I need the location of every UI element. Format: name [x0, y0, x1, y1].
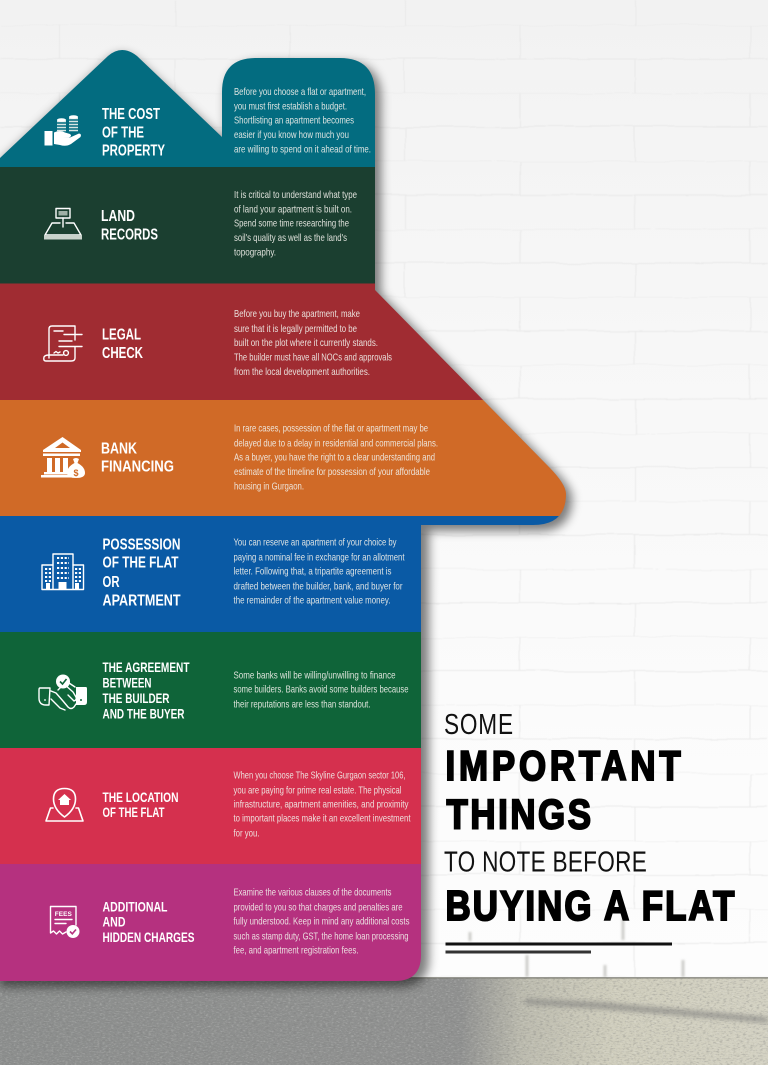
heading: possession of the flat or apartment: OR	[102, 574, 120, 591]
heading: land records	[102, 210, 158, 240]
text: the cost of the property: are willing to spend on it ahead of time.	[234, 144, 371, 156]
heading: the cost of the property: OF THE	[102, 124, 144, 142]
text: land records: soil's quality as well as the land's	[234, 232, 347, 244]
heading: possession of the flat or apartment	[102, 536, 181, 610]
text: bank financing: As a buyer, you have the right to a clear understanding and	[234, 452, 435, 464]
heading: land records: LAND	[101, 208, 135, 225]
icon: location pin with house	[46, 788, 83, 821]
heading: the agreement between the builder and the buyer: THE BUILDER	[102, 690, 170, 706]
panel: the cost of the property	[0, 44, 375, 167]
panel: additional and hidden charges	[0, 864, 421, 981]
text: bank financing: estimate of the timeline for possession of your affordable	[234, 466, 430, 478]
heading: additional and hidden charges: ADDITIONAL	[102, 898, 168, 914]
text: possession of the flat or apartment: the remainder of the apartment value money.	[234, 594, 390, 606]
text: the agreement between the builder and the buyer	[234, 670, 409, 710]
house shadow	[0, 54, 572, 987]
title: IMPORTANT	[446, 743, 681, 790]
heading: the cost of the property: PROPERTY	[102, 142, 165, 160]
title	[444, 707, 734, 930]
text: additional and hidden charges: provided to you so that charges and penalties are	[234, 902, 403, 914]
text: legal check: Before you buy the apartment, make	[234, 308, 360, 320]
text: bank financing: housing in Gurgaon.	[234, 480, 304, 492]
text: possession of the flat or apartment	[234, 536, 405, 606]
heading: the location of the flat: OF THE FLAT	[102, 804, 165, 820]
text: the location of the flat: you are paying for prime real estate. The physical	[234, 784, 402, 796]
text: the agreement between the builder and the buyer: their reputations are less than standout.	[234, 698, 370, 710]
text: the location of the flat: to important places make it an excellent investment	[234, 812, 411, 824]
icon: fees receipt with check	[50, 906, 80, 938]
text: legal check	[234, 308, 392, 378]
text: possession of the flat or apartment: letter. Following that, a tripartite agreement is	[234, 566, 392, 578]
text: the agreement between the builder and the buyer: some builders. Banks avoid some builders because	[234, 684, 409, 696]
heading: legal check: CHECK	[102, 345, 144, 362]
text: legal check: built on the plot where it currently stands.	[234, 337, 378, 349]
heading: bank financing: BANK	[101, 440, 138, 458]
text: additional and hidden charges	[234, 886, 410, 956]
text: the cost of the property: Before you choose a flat or apartment,	[234, 86, 366, 98]
text: possession of the flat or apartment: drafted between the builder, bank, and buyer for	[234, 580, 403, 592]
heading: possession of the flat or apartment: APARTMENT	[102, 592, 181, 610]
panel: legal check	[0, 284, 490, 400]
title: THINGS	[446, 792, 591, 838]
icon: apartment buildings	[42, 554, 84, 590]
heading: the location of the flat: THE LOCATION	[102, 789, 178, 805]
heading: bank financing	[102, 442, 174, 472]
text: bank financing: In rare cases, possession of the flat or apartment may be	[234, 422, 428, 434]
text: the cost of the property	[234, 86, 371, 156]
text: bank financing	[234, 422, 438, 492]
text: bank financing: delayed due to a delay in residential and commercial plans.	[234, 438, 438, 450]
heading: possession of the flat or apartment: OF THE FLAT	[102, 554, 179, 572]
icon: bank with money bag: $	[73, 468, 79, 478]
text: land records: of land your apartment is built on.	[234, 204, 352, 216]
icon: handshake with check mark	[39, 674, 87, 710]
house infographic panels	[0, 44, 575, 981]
title: SOME	[444, 707, 513, 741]
text: land records: Spend some time researching the	[234, 218, 349, 230]
icon: legal document	[44, 326, 82, 361]
title: TO NOTE BEFORE	[444, 845, 647, 878]
heading: the cost of the property: THE COST	[102, 106, 160, 123]
text: additional and hidden charges: fee, and apartment registration fees.	[234, 944, 358, 956]
icon: land plot with sign	[44, 208, 82, 240]
text: the cost of the property: easier if you know how much you	[234, 129, 349, 141]
text: additional and hidden charges: such as stamp duty, GST, the home loan processing	[234, 930, 409, 942]
heading: legal check: LEGAL	[102, 326, 141, 344]
icon: fees receipt with check: FEES	[55, 911, 72, 918]
text: land records: topography.	[234, 246, 276, 258]
text: the cost of the property: Shortlisting an apartment becomes	[234, 114, 354, 126]
heading: the agreement between the builder and the buyer: BETWEEN	[102, 674, 152, 690]
heading: the agreement between the builder and the buyer: THE AGREEMENT	[102, 659, 190, 675]
text: legal check: The builder must have all NOCs and approvals	[234, 352, 392, 364]
text: legal check: sure that it is legally permitted to be	[234, 323, 357, 335]
panel: the location of the flat	[0, 748, 421, 864]
text: additional and hidden charges: fully understood. Keep in mind any additional costs	[234, 916, 410, 928]
icon: hand holding coins	[44, 115, 81, 146]
text: the location of the flat	[234, 770, 411, 840]
text: additional and hidden charges: Examine the various clauses of the documents	[234, 886, 392, 898]
text: the location of the flat: When you choose The Skyline Gurgaon sector 106,	[234, 770, 406, 782]
background: concrete floor	[0, 977, 768, 1065]
text: land records: It is critical to understand what type	[234, 189, 357, 201]
icon: bank with money bag	[41, 437, 85, 478]
heading: bank financing: FINANCING	[101, 458, 174, 476]
text: the location of the flat: for you.	[234, 828, 260, 840]
text: the location of the flat: infrastructure, apartment amenities, and proximity	[234, 798, 409, 810]
text: possession of the flat or apartment: paying a nominal fee in exchange for an allotment	[234, 552, 405, 564]
text: the cost of the property: you must first establish a budget.	[234, 100, 347, 112]
text: land records	[234, 189, 357, 258]
panel: land records	[0, 167, 375, 284]
title: BUYING A FLAT	[446, 883, 734, 930]
title underlines	[446, 942, 672, 954]
heading: the cost of the property	[102, 108, 165, 156]
heading: the agreement between the builder and the buyer: AND THE BUYER	[102, 706, 184, 722]
text: the agreement between the builder and the buyer: Some banks will be willing/unwilling to finance	[234, 670, 396, 682]
panel: bank financing	[0, 400, 575, 516]
heading: the location of the flat	[102, 792, 178, 817]
heading: possession of the flat or apartment: POSSESSION	[102, 536, 180, 554]
panel: possession of the flat or apartment	[0, 516, 560, 632]
text: legal check: from the local development authorities.	[234, 366, 370, 378]
heading: the agreement between the builder and the buyer	[102, 662, 190, 718]
heading: land records: RECORDS	[101, 226, 158, 244]
text: possession of the flat or apartment: You can reserve an apartment of your choice by	[234, 536, 397, 548]
heading: additional and hidden charges: HIDDEN CHARGES	[102, 929, 194, 945]
heading: additional and hidden charges: AND	[102, 914, 126, 930]
heading: legal check	[102, 328, 143, 358]
heading: additional and hidden charges	[102, 902, 194, 942]
panel: the agreement between the builder and the buyer	[0, 632, 421, 748]
